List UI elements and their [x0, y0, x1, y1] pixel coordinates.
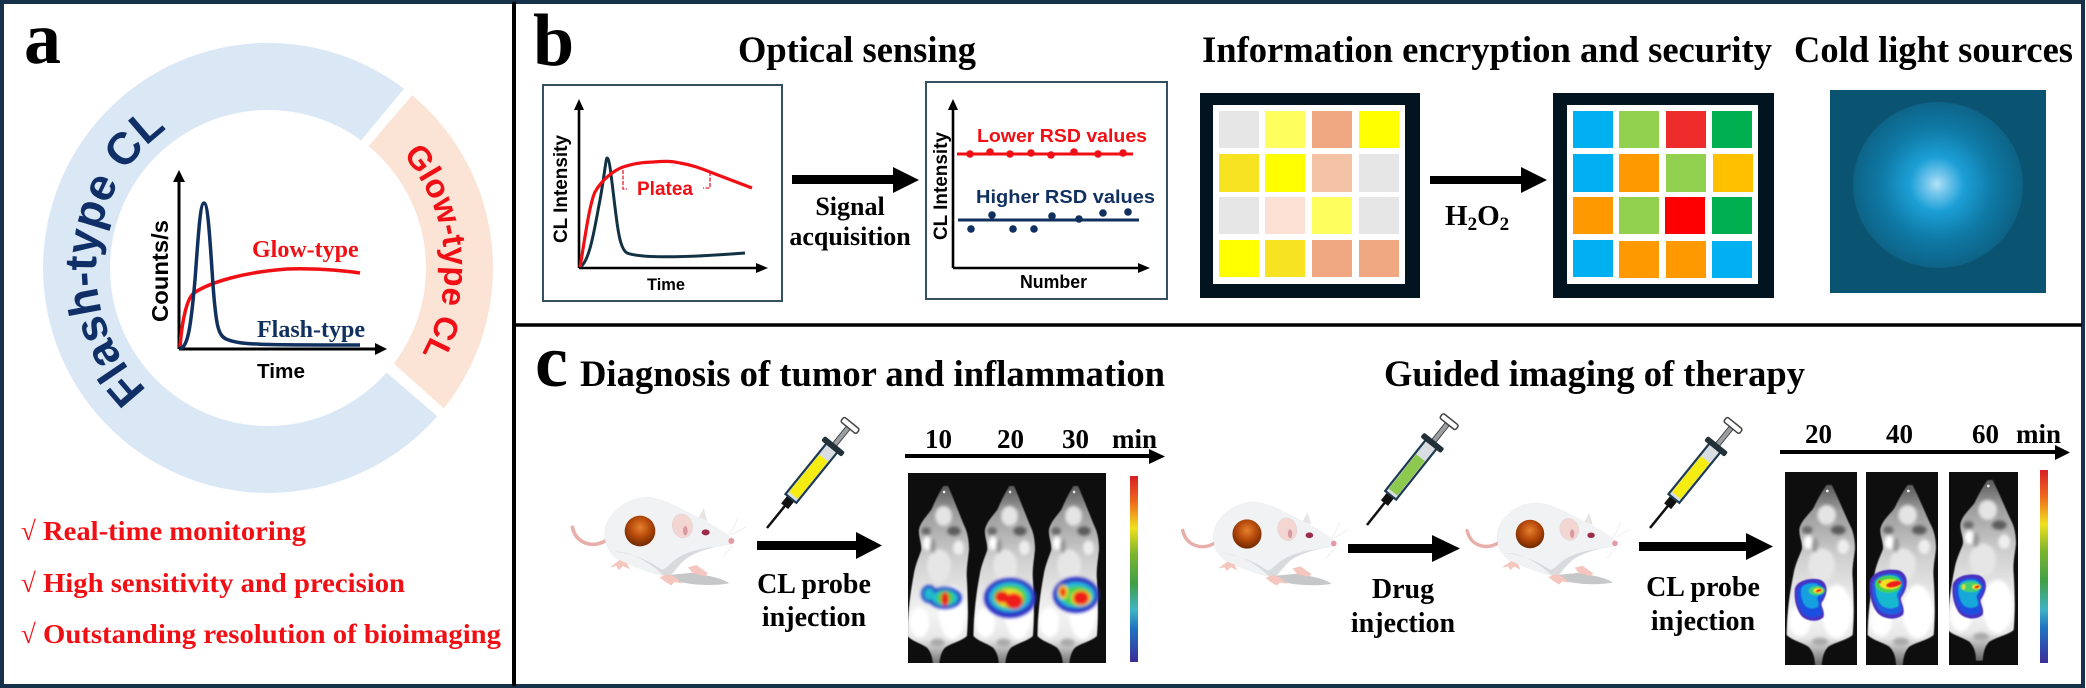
label: H2O2: 2 — [1500, 214, 1509, 235]
label flash-type: Flash-type — [257, 317, 365, 343]
x axis arrowhead — [375, 343, 387, 355]
panel b: applications — [533, 0, 2073, 301]
axes — [179, 180, 376, 349]
timeline 1: 30 — [1062, 424, 1089, 454]
axes — [579, 108, 757, 268]
mouse with tumor 3 — [1467, 503, 1629, 585]
arrow: CL probe injection 1 — [757, 532, 882, 559]
syringe: drug — [1357, 411, 1461, 533]
arrow: signal acquisition — [792, 167, 919, 193]
timeline 2: 60 — [1972, 419, 1999, 449]
colour scale 2 — [2040, 470, 2048, 663]
advantage 3: √ — [21, 619, 36, 649]
timeline 2 — [1780, 419, 2070, 460]
heading: optical sensing: Optical sensing — [738, 30, 976, 71]
advantage 1: Real-time monitoring — [43, 516, 307, 546]
timeline 2: 20 — [1805, 419, 1832, 449]
y label: CL Intensity — [551, 135, 572, 243]
x label: Time — [647, 275, 685, 294]
label: drug injection: injection — [1351, 608, 1456, 639]
advantage 2: High sensitivity and precision — [43, 568, 405, 598]
label: H2O2: H — [1445, 200, 1468, 232]
axes — [953, 108, 1140, 268]
flash curve — [180, 203, 360, 348]
imaging panel: 20 min — [1785, 472, 1857, 665]
imaging panel: 60 min — [1949, 472, 2018, 665]
label lower RSD: Lower RSD values — [977, 125, 1147, 146]
heading: diagnosis: Diagnosis of tumor and inflammation — [580, 354, 1165, 395]
flash curve — [580, 158, 745, 267]
syringe: CL probe 2 — [1640, 415, 1745, 536]
mouse with tumor 1 — [572, 497, 746, 585]
timeline 1: min — [1112, 424, 1157, 454]
chart: CL intensity curves — [543, 85, 782, 301]
axis arrowheads — [574, 99, 768, 273]
label: CL probe injection 2: CL probe — [1646, 572, 1760, 603]
y axis arrowhead — [173, 170, 185, 182]
plateau markers — [623, 170, 710, 189]
panel letter b: b — [533, 0, 574, 82]
chart frame — [926, 82, 1167, 299]
encryption array after H2O2 — [1553, 93, 1774, 298]
timeline 2: 40 — [1886, 419, 1913, 449]
label: CL probe injection 1: CL probe — [757, 569, 871, 600]
timeline 1: 10 — [925, 424, 952, 454]
panel letter a: a — [24, 0, 61, 80]
label: drug injection: Drug — [1372, 574, 1434, 605]
label: CL probe injection 1: injection — [762, 602, 867, 633]
timeline 2: min — [2016, 419, 2061, 449]
mouse with tumor 2 — [1183, 502, 1348, 586]
panel a: flash-type and glow-type CL — [21, 0, 502, 649]
syringe: CL probe 1 — [757, 415, 862, 536]
arrow: H2O2 — [1430, 167, 1547, 193]
heading: cold light sources: Cold light sources — [1794, 30, 2073, 71]
heading: information encryption: Information encryption and security — [1202, 30, 1772, 71]
imaging panel: 40 min — [1866, 472, 1938, 665]
advantage 3: Outstanding resolution of bioimaging — [43, 619, 502, 649]
ring label: Flash-type CL: Flash-type CL — [66, 116, 166, 408]
label: CL probe injection 2: injection — [1651, 606, 1756, 637]
label: signal acquisition: acquisition — [789, 222, 911, 251]
ring label: Glow-type CL: Glow-type CL — [408, 146, 464, 355]
ring segment: glow-type — [368, 95, 493, 408]
advantage 2: √ — [21, 568, 36, 598]
timeline 1: 20 — [997, 424, 1024, 454]
axis arrowheads — [948, 99, 1150, 273]
label: signal acquisition: Signal — [815, 192, 885, 221]
imaging panel: 10, 20, 30 min — [908, 473, 1106, 663]
advantage 1: √ — [21, 516, 36, 546]
encryption array before H2O2 — [1200, 93, 1420, 298]
lower RSD series — [957, 148, 1133, 159]
arrow: CL probe injection 2 — [1639, 533, 1773, 560]
timeline 1 — [905, 424, 1165, 464]
label glow-type: Glow-type — [252, 237, 359, 263]
glow curve — [180, 269, 360, 347]
arrow: drug injection — [1348, 535, 1460, 562]
panel c: in vivo imaging — [535, 321, 2070, 667]
glow curve — [580, 161, 752, 267]
chart: RSD values — [926, 82, 1167, 299]
chart: counts over time — [147, 170, 387, 383]
y axis label: Counts/s — [147, 220, 173, 322]
cold light source glow — [1830, 90, 2046, 293]
label: H2O2: 2 — [1468, 214, 1477, 235]
x axis label: Time — [257, 361, 305, 383]
plateau label: Platea — [637, 179, 693, 200]
ring segment: flash-type — [43, 43, 437, 493]
label higher RSD: Higher RSD values — [976, 186, 1155, 207]
advantages list — [21, 516, 502, 649]
panel letter c: c — [535, 321, 568, 403]
colour scale 1 — [1130, 476, 1138, 662]
x label: Number — [1020, 272, 1087, 292]
higher RSD series — [958, 208, 1139, 233]
y label: CL Intensity — [931, 132, 952, 240]
chart frame — [543, 85, 782, 301]
label: H2O2: O — [1477, 200, 1500, 232]
heading: guided imaging: Guided imaging of therapy — [1384, 354, 1805, 395]
